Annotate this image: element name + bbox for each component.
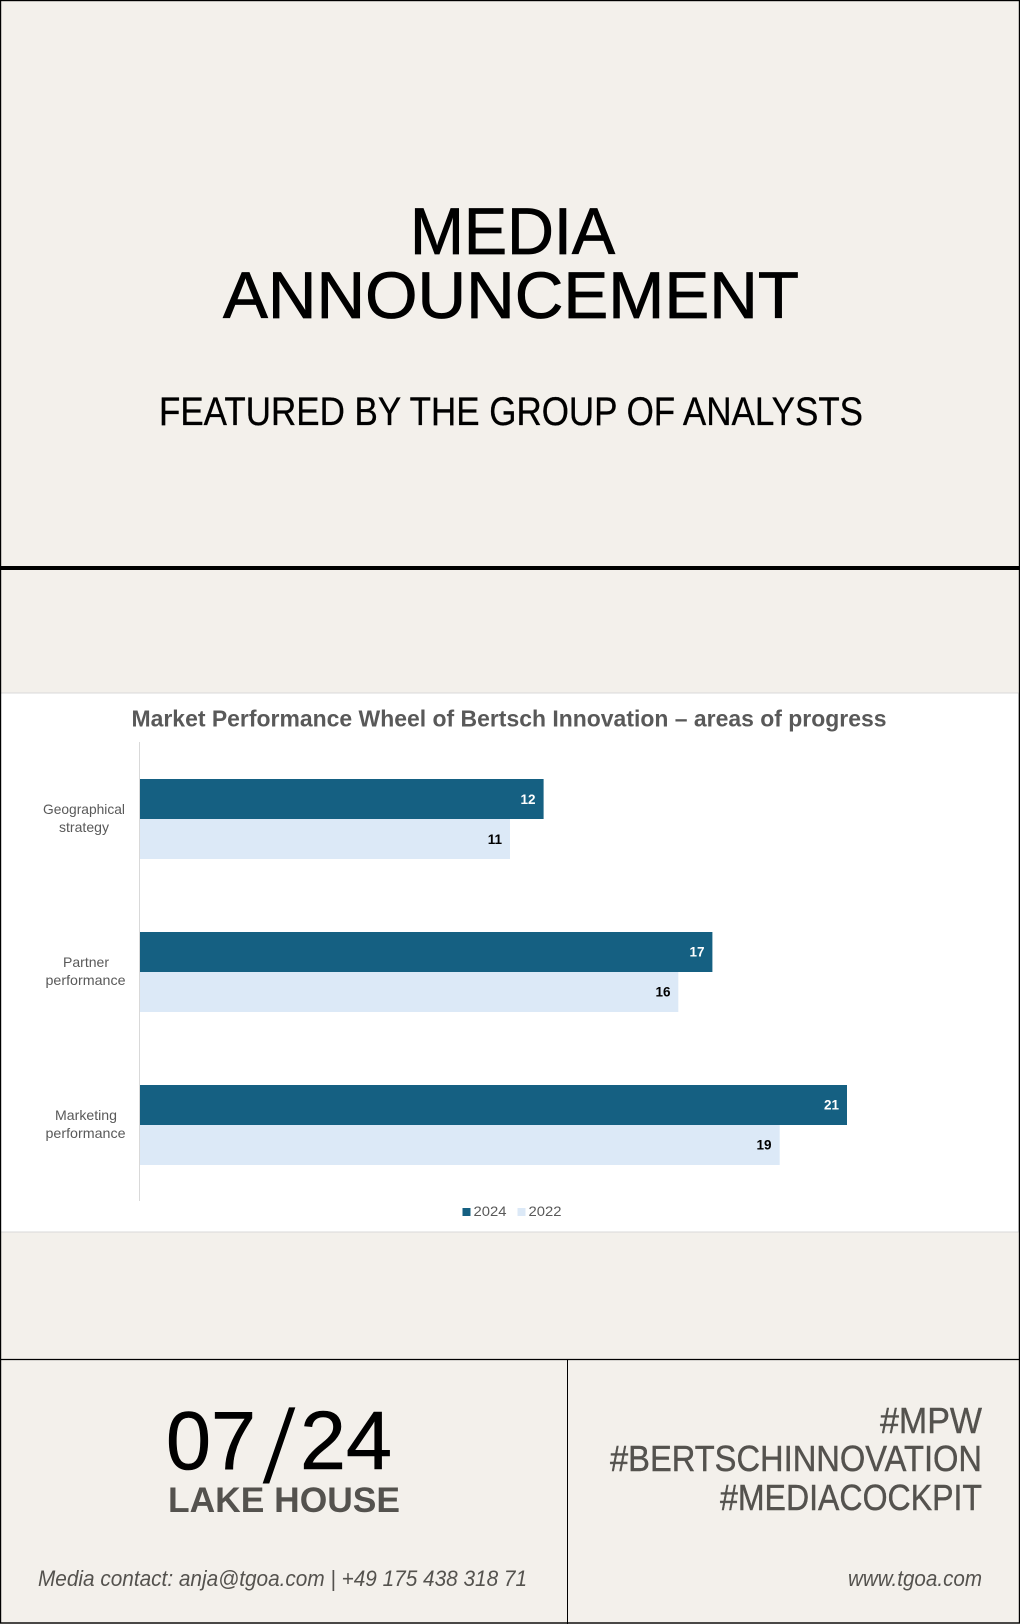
- label: [43, 801, 125, 835]
- bar 2022: 16: 16: [655, 984, 671, 1000]
- title: ANNOUNCEMENT: [223, 258, 799, 332]
- title: [223, 194, 799, 332]
- event date: /: [260, 1386, 298, 1507]
- bar 2022: 16: [140, 972, 678, 1012]
- event date: 24: [300, 1394, 392, 1487]
- event date: 07: [166, 1394, 256, 1487]
- bar 2024: 12: [140, 779, 544, 819]
- event location: LAKE HOUSE: [168, 1481, 400, 1520]
- label: performance: [46, 972, 126, 988]
- legend: 2022: [528, 1203, 562, 1219]
- label: [46, 954, 126, 988]
- category: Marketing performance: [46, 1085, 847, 1165]
- website: www.tgoa.com: [848, 1566, 982, 1591]
- panel: hashtags and website: [610, 1400, 982, 1591]
- bar 2022: 11: [140, 819, 510, 859]
- bar 2024: 21: 21: [824, 1098, 839, 1112]
- panel: event details: [38, 1386, 527, 1591]
- label: Partner: [63, 954, 109, 970]
- media contact: Media contact: anja@tgoa.com | +49 175 438 318 71: [38, 1566, 527, 1591]
- hashtags: #MEDIACOCKPIT: [720, 1477, 982, 1518]
- panel: bar chart card: [0, 693, 1018, 1232]
- category: Geographical strategy: [43, 779, 544, 859]
- event date: [166, 1386, 392, 1507]
- bar 2022: 11: 11: [488, 832, 502, 847]
- legend: [462, 1203, 562, 1219]
- hashtags: #BERTSCHINNOVATION: [610, 1438, 982, 1479]
- bar 2024: 21: [140, 1085, 847, 1125]
- label: Geographical: [43, 801, 125, 817]
- panel: header: [159, 194, 863, 434]
- chart title: Market Performance Wheel of Bertsch Innovation – areas of progress: [132, 706, 886, 732]
- label: strategy: [59, 819, 109, 835]
- title: MEDIA: [410, 194, 615, 268]
- bar 2024: 12: 12: [520, 792, 536, 807]
- subtitle: FEATURED BY THE GROUP OF ANALYSTS: [159, 390, 863, 434]
- hashtags: #MPW: [880, 1400, 982, 1441]
- label: [46, 1107, 126, 1141]
- category: Partner performance: [46, 932, 712, 1012]
- legend: 2024: [474, 1203, 507, 1219]
- bar 2022: 19: 19: [756, 1138, 772, 1152]
- bar 2024: 17: [140, 932, 712, 972]
- bar 2024: 17: 17: [689, 944, 704, 960]
- label: Marketing: [55, 1107, 117, 1123]
- label: performance: [46, 1125, 126, 1141]
- bar 2022: 19: [140, 1125, 780, 1165]
- hashtags: [610, 1400, 982, 1518]
